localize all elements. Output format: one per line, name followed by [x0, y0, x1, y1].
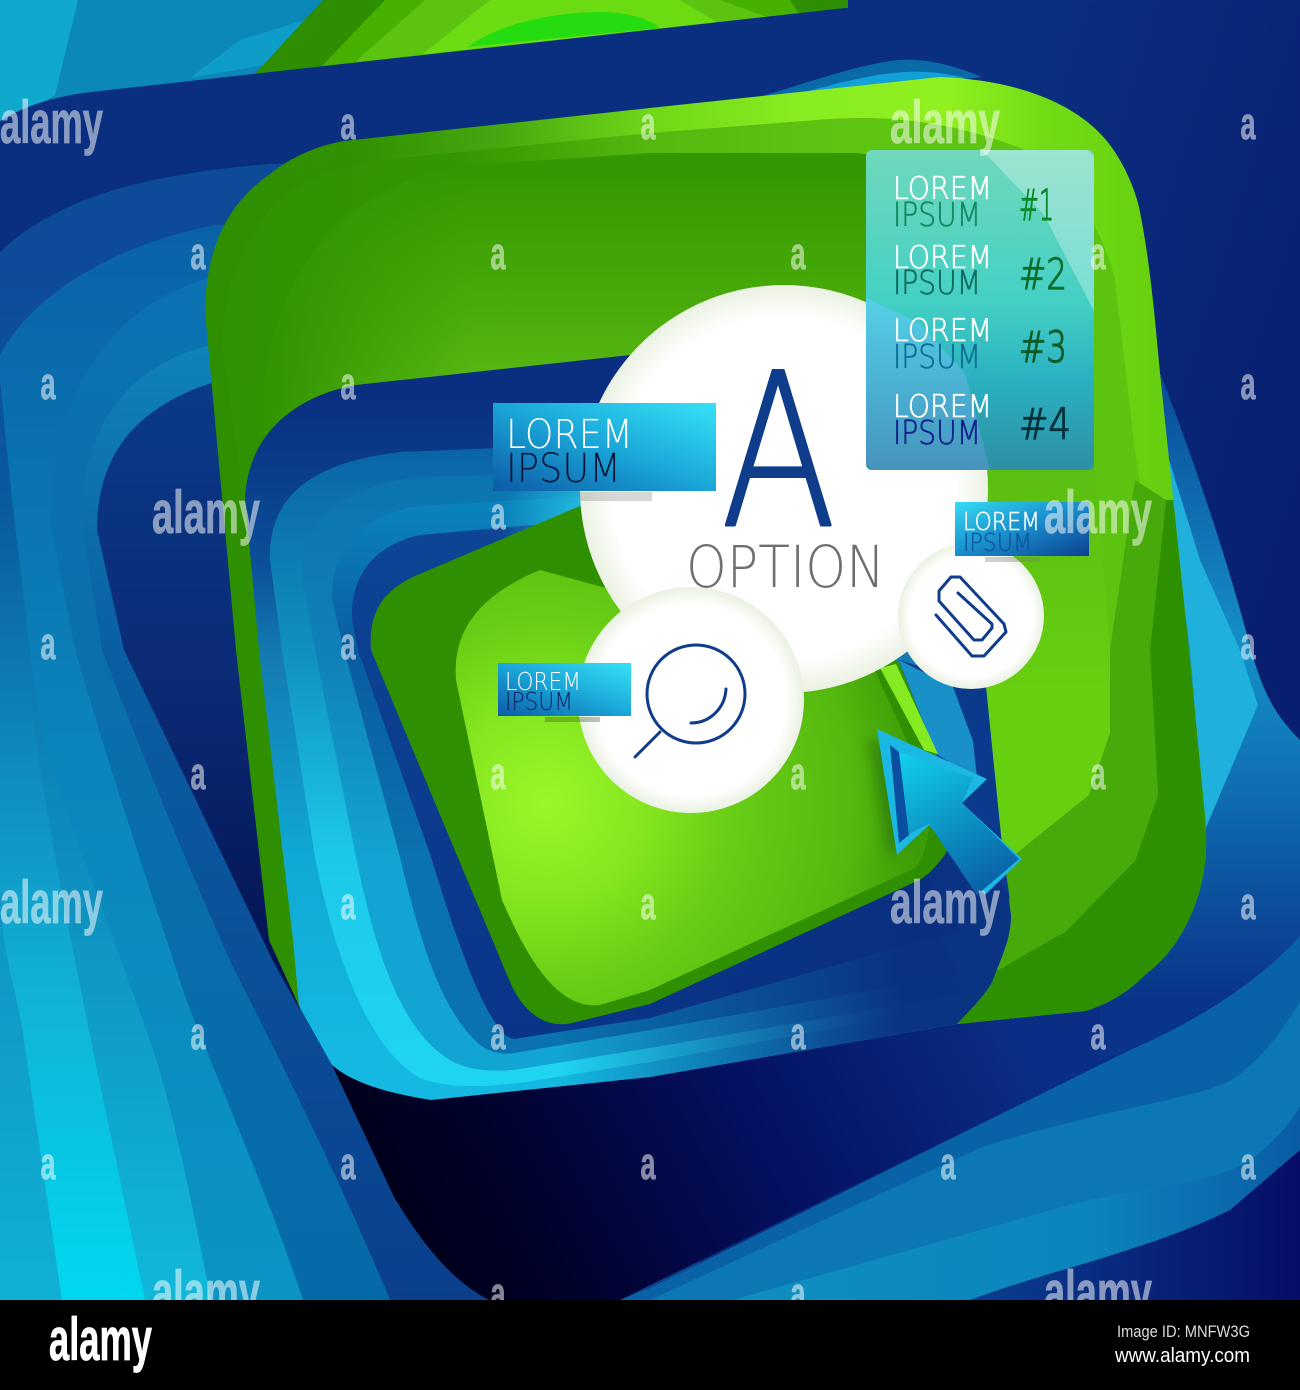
letter A heading: A	[721, 328, 836, 575]
watermark: alamy logos and small marks: a	[790, 1008, 806, 1059]
background: dark lower square	[290, 800, 1300, 1300]
list row 1: IPSUM	[893, 195, 981, 234]
watermark: alamy logos and small marks: a	[640, 98, 656, 149]
watermark: alamy logos and small marks: a	[40, 618, 56, 669]
icon: magnifier	[635, 645, 745, 757]
list row 4	[893, 389, 1071, 452]
watermark: alamy logos and small marks: a	[1090, 228, 1106, 279]
watermark: alamy logos and small marks: a	[640, 878, 656, 929]
watermark: alamy logos and small marks: a	[1090, 748, 1106, 799]
list row 4: IPSUM	[893, 413, 981, 452]
watermark: alamy logos and small marks: a	[340, 878, 356, 929]
list row 3: IPSUM	[893, 337, 981, 376]
background: left fan of blue and cyan stripes	[0, 164, 700, 1300]
list row 2: IPSUM	[893, 263, 981, 302]
watermark: alamy logos and small marks: alamy	[890, 869, 1000, 936]
watermark: alamy logos and small marks: a	[490, 748, 506, 799]
watermark: alamy logos and small marks: a	[790, 1268, 806, 1319]
label: large lorem ipsum tag: IPSUM	[506, 446, 621, 492]
watermark: alamy logos and small marks: a	[190, 748, 206, 799]
watermark: alamy logos and small marks: alamy	[0, 869, 103, 936]
watermark: alamy logos and small marks: a	[340, 1138, 356, 1189]
label: small right lorem ipsum tag: IPSUM	[963, 528, 1032, 557]
watermark: alamy logos and small marks: alamy	[152, 479, 260, 546]
watermark: alamy logos and small marks: a	[1240, 98, 1256, 149]
watermark: alamy logos and small marks: alamy	[890, 89, 1000, 156]
label: large lorem ipsum tag	[493, 403, 716, 501]
background: dark navy strip left of green	[97, 380, 320, 1010]
watermark: alamy logos and small marks: a	[1240, 878, 1256, 929]
list row 1	[893, 171, 1054, 234]
icon: paperclip	[936, 577, 1006, 656]
background: top green peek	[255, 0, 848, 74]
watermark: alamy logos and small marks: a	[1240, 618, 1256, 669]
list row 3	[893, 313, 1067, 376]
green outer rounded square	[205, 77, 1206, 1024]
watermark: alamy logos and small marks: a	[40, 1138, 56, 1189]
watermark: alamy logos and small marks: a	[490, 228, 506, 279]
label: small right lorem ipsum tag: LOREM	[963, 507, 1040, 536]
panel: ranked list	[866, 150, 1094, 470]
watermark: alamy logos and small marks: a	[790, 748, 806, 799]
watermark: alamy logos and small marks: a	[490, 1268, 506, 1319]
footer: image id: Image ID: MNFW3G	[1117, 1322, 1250, 1341]
label: small left lorem ipsum tag	[498, 663, 631, 722]
watermark: alamy logos and small marks: alamy	[1044, 479, 1152, 546]
watermark: alamy logos and small marks: a	[640, 1138, 656, 1189]
list row 1: LOREM	[893, 171, 992, 207]
label: small left lorem ipsum tag: IPSUM	[505, 687, 573, 716]
background: large navy rotated square	[0, 0, 1300, 1010]
watermark: alamy logos and small marks: a	[1090, 1008, 1106, 1059]
watermark: alamy logos and small marks: a	[40, 358, 56, 409]
blue inner swirl with rim bands	[245, 354, 1020, 1110]
background: bottom-right diagonal stripes	[620, 936, 1300, 1300]
watermark: alamy logos and small marks: a	[790, 228, 806, 279]
watermark: alamy logos and small marks: a	[1240, 1138, 1256, 1189]
green inner rounded square	[371, 506, 951, 1024]
watermark: alamy logos and small marks: a	[190, 228, 206, 279]
label: large lorem ipsum tag: LOREM	[506, 412, 633, 458]
watermark: alamy logos and small marks: a	[490, 1008, 506, 1059]
list row 4: #4	[1019, 400, 1071, 450]
watermark: alamy logos and small marks: a	[340, 618, 356, 669]
watermark: alamy logos and small marks: alamy	[1044, 1259, 1152, 1326]
main white circle	[580, 285, 988, 693]
blue strip behind arrow	[880, 660, 1010, 900]
list row 3: LOREM	[893, 313, 992, 349]
watermark: alamy logos and small marks: a	[190, 1008, 206, 1059]
watermark: alamy logos and small marks: alamy	[152, 1259, 260, 1326]
list row 4: LOREM	[893, 389, 992, 425]
list row 1: #1	[1019, 181, 1054, 231]
arrow pointing up-left	[868, 729, 1022, 895]
list row 2: LOREM	[893, 240, 992, 276]
watermark: alamy logos and small marks: a	[340, 98, 356, 149]
watermark: alamy logos and small marks: alamy	[0, 89, 103, 156]
watermark: alamy logos and small marks: a	[940, 1138, 956, 1189]
option label: OPTION	[686, 533, 885, 601]
footer: alamy logo: alamy	[49, 1306, 152, 1373]
label: small right lorem ipsum tag	[955, 502, 1089, 562]
list row 3: #3	[1019, 323, 1067, 373]
list row 2	[893, 240, 1067, 302]
label: small left lorem ipsum tag: LOREM	[505, 667, 581, 696]
watermark: alamy logos and small marks: a	[340, 358, 356, 409]
list row 2: #2	[1019, 250, 1067, 300]
background: top-left light blue fan	[0, 0, 340, 140]
background: right blue swirl	[733, 60, 1300, 1060]
watermark: alamy logos and small marks: a	[490, 488, 506, 539]
footer: black credit band	[0, 1300, 1300, 1390]
magnifier white circle	[578, 587, 804, 813]
footer: website: www.alamy.com	[1114, 1345, 1250, 1367]
paperclip white circle	[898, 543, 1044, 689]
watermark: alamy logos and small marks: a	[1240, 358, 1256, 409]
